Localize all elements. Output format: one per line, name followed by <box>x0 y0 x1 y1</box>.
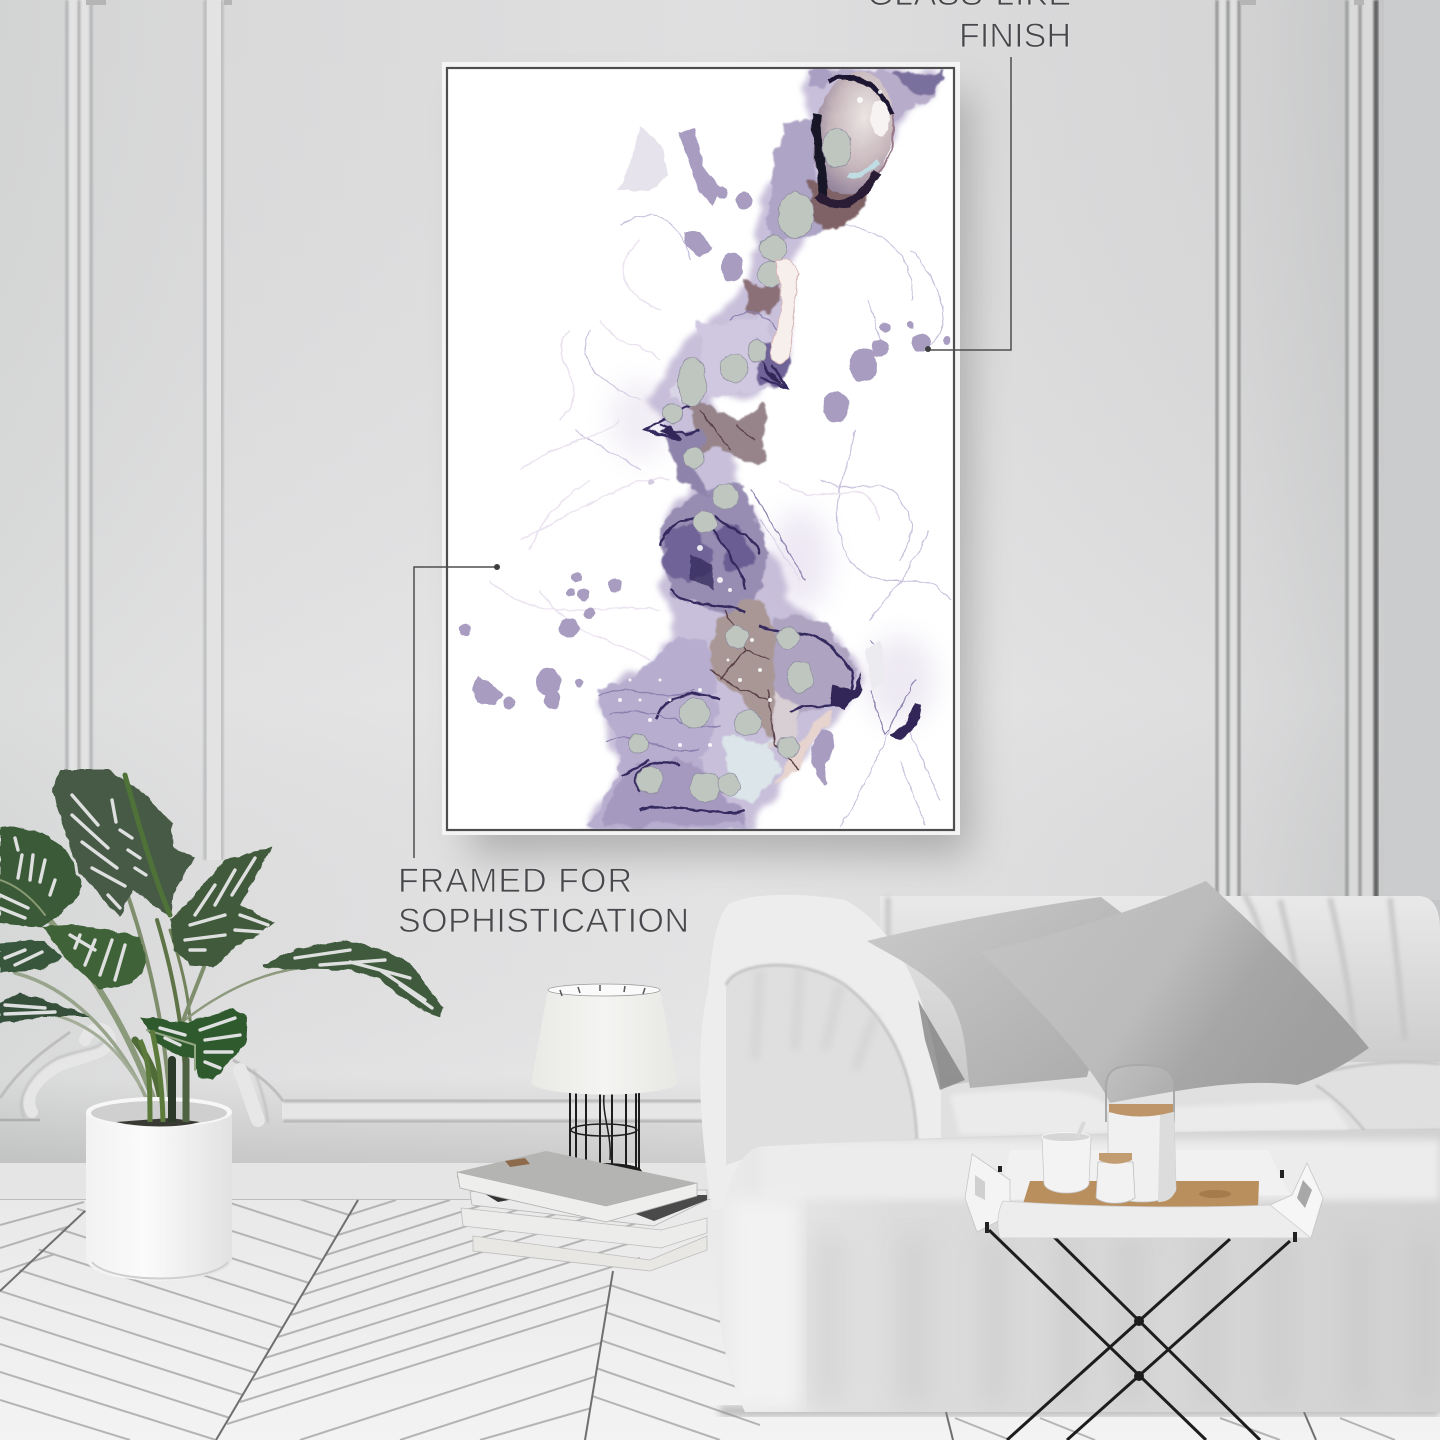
wall moulding: right panel <box>1216 0 1376 900</box>
pearl form <box>810 72 895 208</box>
stems <box>15 893 300 1117</box>
upper band <box>745 280 780 315</box>
glass dome <box>1106 1065 1174 1122</box>
book 3 <box>461 1208 707 1248</box>
skirting <box>0 1163 712 1201</box>
callout: glass-like finish <box>867 0 1071 352</box>
tray <box>965 1065 1323 1242</box>
leaf slits <box>0 795 432 1068</box>
front seat roll <box>717 1130 1440 1412</box>
wooden board <box>1022 1181 1259 1207</box>
cup <box>1042 1137 1091 1193</box>
tray clips <box>987 1166 1295 1242</box>
plant pot <box>86 1030 232 1280</box>
back pillow <box>867 897 1127 1088</box>
framed artwork <box>442 62 960 835</box>
monstera leaves <box>0 770 443 1080</box>
faint veins <box>575 215 950 826</box>
table lamp <box>531 984 678 1179</box>
back cushions <box>880 896 1440 1090</box>
alcohol ink artwork <box>459 64 951 832</box>
bright midrib highlights <box>0 775 195 1070</box>
jar <box>1096 1162 1135 1203</box>
lilac splatter <box>459 128 951 785</box>
sofa shadow <box>720 1406 1440 1416</box>
tray front lip <box>998 1201 1311 1238</box>
mid brown <box>690 402 765 465</box>
painting shadow <box>470 95 970 855</box>
stack of books <box>457 1151 707 1271</box>
dark ink edges <box>622 365 853 813</box>
canister <box>1108 1112 1176 1202</box>
wall moulding: left panel <box>66 0 232 860</box>
side table legs <box>989 1230 1290 1440</box>
book 2 <box>470 1190 707 1226</box>
sofa <box>700 881 1440 1412</box>
plant <box>0 770 443 1117</box>
front pillow <box>981 881 1369 1103</box>
tray surface <box>1000 1150 1290 1200</box>
floor <box>0 1200 1440 1440</box>
book 4 <box>473 1236 707 1271</box>
callout: framed for sophistication: FRAMED FOR <box>398 862 632 900</box>
book 1 <box>457 1151 697 1210</box>
tray right handle <box>1270 1163 1323 1238</box>
seat cushions <box>940 1062 1440 1200</box>
ink wash layers <box>585 70 940 832</box>
brown centre <box>708 598 777 738</box>
lower left lilac pool <box>585 640 750 830</box>
white specks <box>618 90 882 747</box>
callout: glass-like finish: FINISH <box>959 17 1071 55</box>
arm <box>700 895 941 1210</box>
pale drops <box>618 125 885 690</box>
callout: framed for sophistication: SOPHISTICATION <box>398 902 689 940</box>
sage droplets <box>628 128 851 802</box>
wall moulding: lower panel with ornament <box>0 1029 705 1122</box>
tray left handle <box>965 1154 1010 1232</box>
purple mass <box>662 485 765 612</box>
callout: framed for sophistication <box>398 564 689 940</box>
frame <box>442 62 960 835</box>
dark ink accents <box>660 360 922 740</box>
